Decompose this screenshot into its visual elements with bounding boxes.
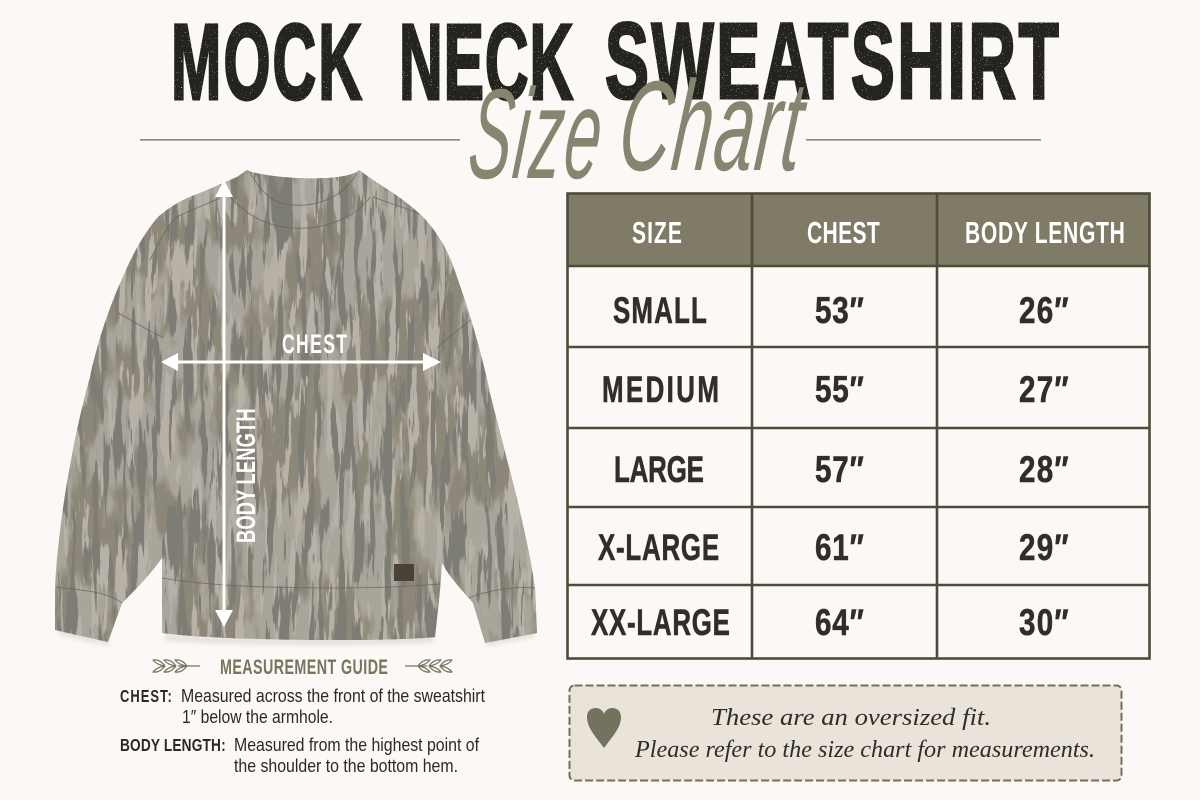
- heading: measurement guide: MEASUREMENT GUIDE: [220, 655, 388, 679]
- table row: x-large: [598, 526, 1069, 569]
- subtitle rule left: [140, 139, 460, 141]
- title: [171, 0, 1059, 122]
- table header labels: SIZE: [632, 215, 682, 250]
- table row: x-large: X-LARGE: [598, 526, 719, 568]
- label: chest: CHEST: [282, 328, 347, 359]
- table header labels: BODY LENGTH: [965, 215, 1125, 250]
- table header labels: CHEST: [807, 215, 880, 250]
- chest measurement note: 1″ below the armhole.: [182, 707, 333, 727]
- table row: large: LARGE: [614, 448, 704, 490]
- chest measurement note: Measured across the front of the sweatshirt: [181, 686, 485, 706]
- icon: left sprig: [153, 660, 200, 672]
- table row: medium: 55″: [815, 370, 864, 411]
- table row: x-large: 29″: [1019, 528, 1069, 569]
- table header background: [567, 193, 1150, 266]
- callout text: These are an oversized fit.: [711, 705, 991, 731]
- callout text: [634, 705, 1095, 763]
- chest measurement note: CHEST:: [120, 687, 172, 707]
- subtitle rule right: [806, 139, 1041, 141]
- body length measurement note: Measured from the highest point of: [234, 735, 480, 755]
- table row: xx-large: [591, 601, 1069, 644]
- body length measurement note: the shoulder to the bottom hem.: [234, 756, 458, 776]
- table row: small: SMALL: [613, 289, 707, 331]
- chest measurement note: [120, 686, 485, 727]
- body length measurement note: BODY LENGTH:: [120, 736, 226, 756]
- arrow: body length: [215, 180, 233, 627]
- table row: x-large: 61″: [815, 528, 864, 569]
- table row: medium: 27″: [1019, 370, 1069, 411]
- table row: large: 28″: [1019, 450, 1069, 491]
- subtitle: Size Chart: Chart: [613, 56, 813, 198]
- label: body length: BODY LENGTH: [230, 408, 261, 543]
- table row: xx-large: 64″: [815, 603, 864, 644]
- subtitle: Size Chart: Size: [463, 62, 609, 206]
- table row: small: [613, 289, 1069, 332]
- icon: right sprig: [405, 660, 452, 672]
- arrow: chest: [161, 353, 441, 371]
- table row: xx-large: 30″: [1019, 603, 1069, 644]
- sweatshirt hem label: [394, 564, 414, 581]
- table header labels: [632, 215, 1125, 250]
- table row: medium: [602, 368, 1069, 411]
- title: MOCK: [171, 2, 362, 122]
- sweatshirt shadow: [60, 628, 534, 646]
- sweatshirt illustration: [40, 160, 550, 655]
- size table: [567, 193, 1150, 659]
- table row: small: 26″: [1019, 291, 1069, 332]
- body length measurement note: [120, 735, 480, 776]
- table row: xx-large: XX-LARGE: [591, 601, 730, 643]
- title: SWEATSHIRT: [605, 0, 1059, 121]
- table row: large: [614, 448, 1069, 491]
- icon: heart: [587, 708, 621, 748]
- callout text: Please refer to the size chart for measurements.: [634, 737, 1095, 763]
- table row: medium: MEDIUM: [602, 368, 719, 410]
- callout: oversized fit note: [570, 686, 1122, 780]
- table row: large: 57″: [815, 450, 864, 491]
- subtitle: Size Chart: [463, 56, 813, 206]
- title: NECK: [399, 2, 573, 122]
- table row: small: 53″: [815, 291, 864, 332]
